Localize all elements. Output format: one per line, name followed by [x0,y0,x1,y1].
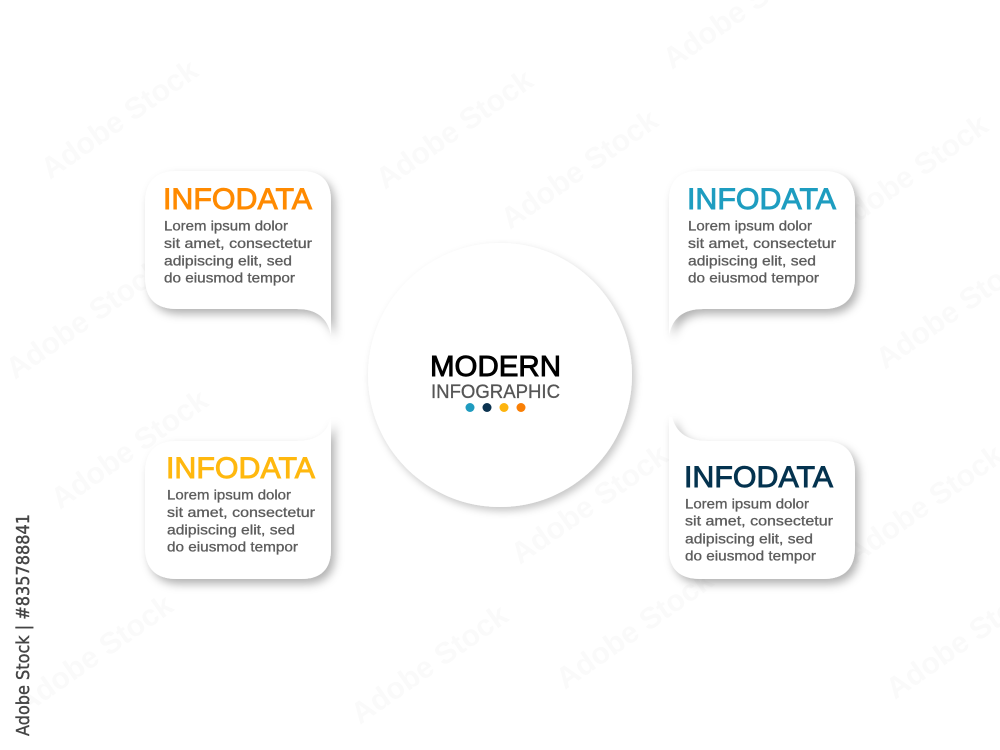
card shape [145,171,331,335]
watermark pattern: Adobe Stock [825,108,994,241]
text block [688,218,837,286]
text block: do eiusmod tempor [685,548,817,564]
text block: Lorem ipsum dolor [164,218,289,234]
heading: INFODATA [166,452,315,485]
text block: do eiusmod tempor [688,270,820,286]
stock id label: Adobe Stock | #835788841 [13,514,34,736]
text block: adipiscing elit, sed [685,532,813,546]
watermark pattern: Adobe Stock [550,563,719,696]
heading: INFODATA [687,183,836,216]
text block: Lorem ipsum dolor [167,488,292,502]
text block: adipiscing elit, sed [688,254,816,268]
panel: central circle [368,243,632,507]
text block [167,488,316,554]
text block: sit amet, consectetur [688,236,837,251]
card shape [669,417,855,579]
watermark pattern: Adobe Stock [35,53,204,186]
watermark pattern: Adobe Stock [505,438,674,571]
text block: Lorem ipsum dolor [685,496,810,512]
panel: bottom-left card [145,417,331,579]
text block: do eiusmod tempor [167,540,299,554]
subtitle: infographic: INFOGRAPHIC [431,381,560,403]
colour dots [466,403,526,412]
heading: INFODATA [163,183,312,216]
watermark pattern: Adobe Stock [495,103,664,236]
watermark pattern: Adobe Stock [10,588,179,721]
text block: adipiscing elit, sed [164,254,292,268]
text block: Lorem ipsum dolor [688,218,813,234]
watermark pattern: Adobe Stock [45,383,214,516]
text block [685,496,834,564]
panel: top-right card [669,171,855,335]
panel: top-left card [145,171,331,335]
watermark pattern: Adobe Stock [345,598,514,731]
heading: INFODATA [684,461,833,494]
watermark pattern: Adobe Stock [370,63,539,196]
circle [368,243,632,507]
text block: do eiusmod tempor [164,270,296,286]
text block: sit amet, consectetur [167,505,316,520]
card shape [669,171,855,335]
text block: sit amet, consectetur [685,514,834,528]
title: modern: MODERN [430,351,561,383]
text block: adipiscing elit, sed [167,522,295,538]
watermark pattern: Adobe Stock [0,253,169,386]
text block: sit amet, consectetur [164,236,313,251]
card shape [145,417,331,579]
panel: bottom-right card [669,417,855,579]
text block [164,218,313,286]
